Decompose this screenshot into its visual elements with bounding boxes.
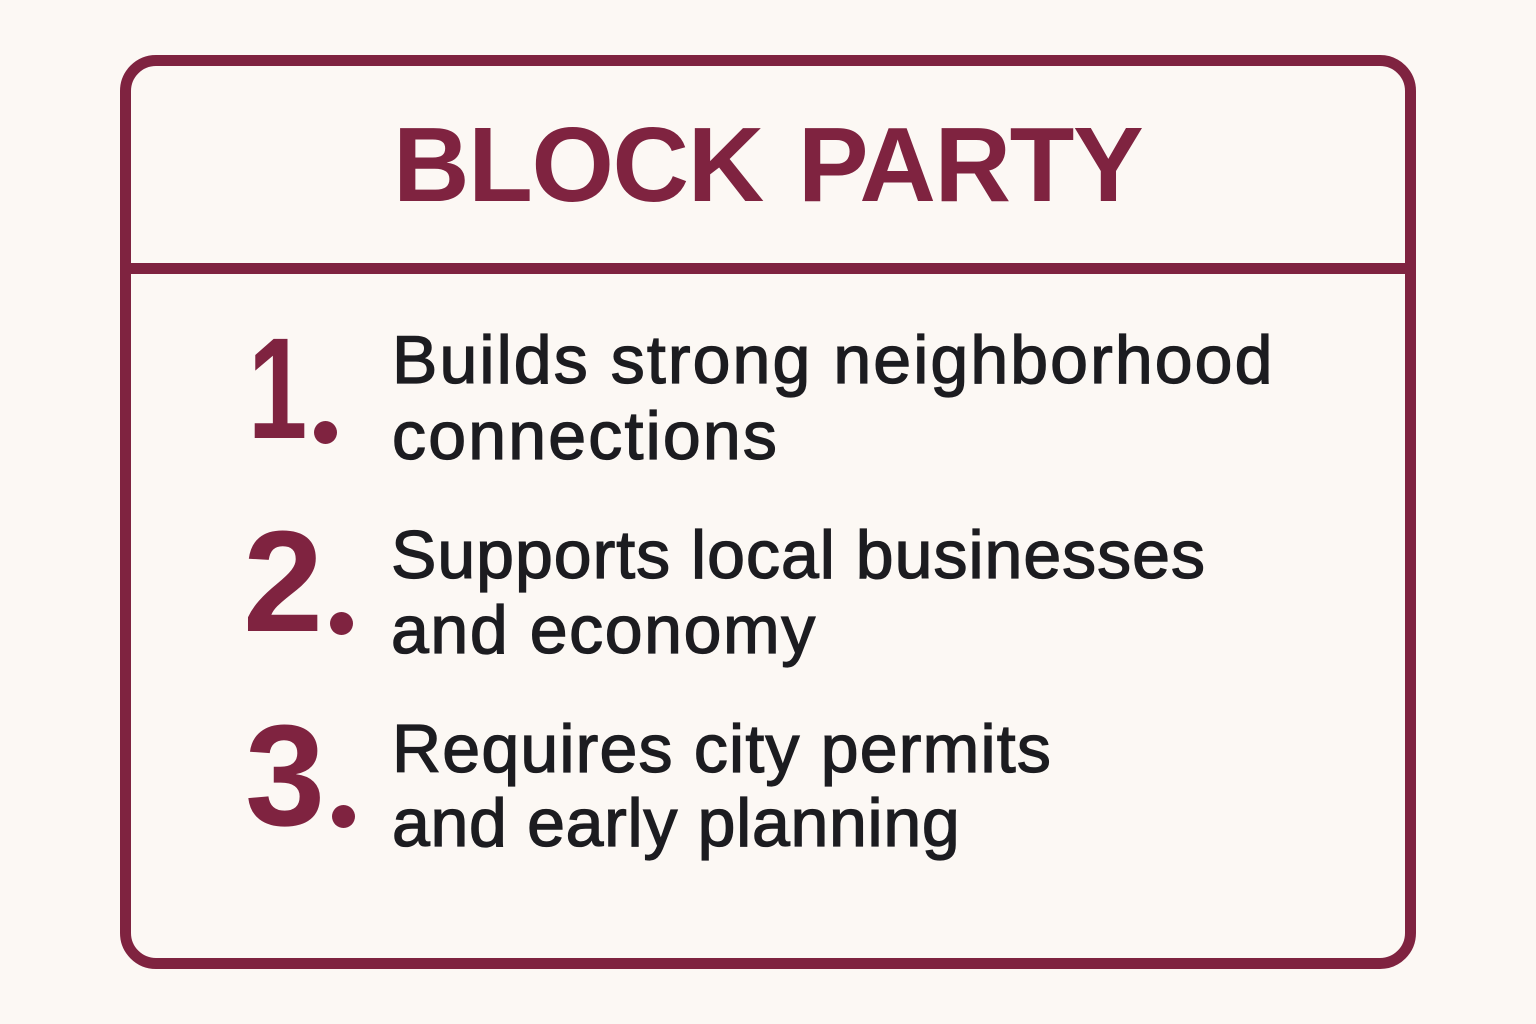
text: item 3: and early planning [392,785,960,861]
text: item 1: Builds strong neighborhood [392,322,1275,398]
number 2: 2 [243,501,323,662]
number 1 [248,308,337,469]
text: item 2: and economy [391,592,817,668]
text: item 3: Requires city permits [392,711,1052,787]
panel: block party card [120,55,1416,969]
text: item 3 [392,711,1052,861]
text: item 1: connections [392,398,779,474]
text: item 2 [391,517,1206,668]
number 3: 3 [245,695,325,856]
title: BLOCK PARTY [393,106,1142,224]
text: item 2: Supports local businesses [391,517,1206,593]
text: item 1 [392,322,1275,474]
number 1: 1 [248,308,307,469]
header divider [126,263,1410,274]
